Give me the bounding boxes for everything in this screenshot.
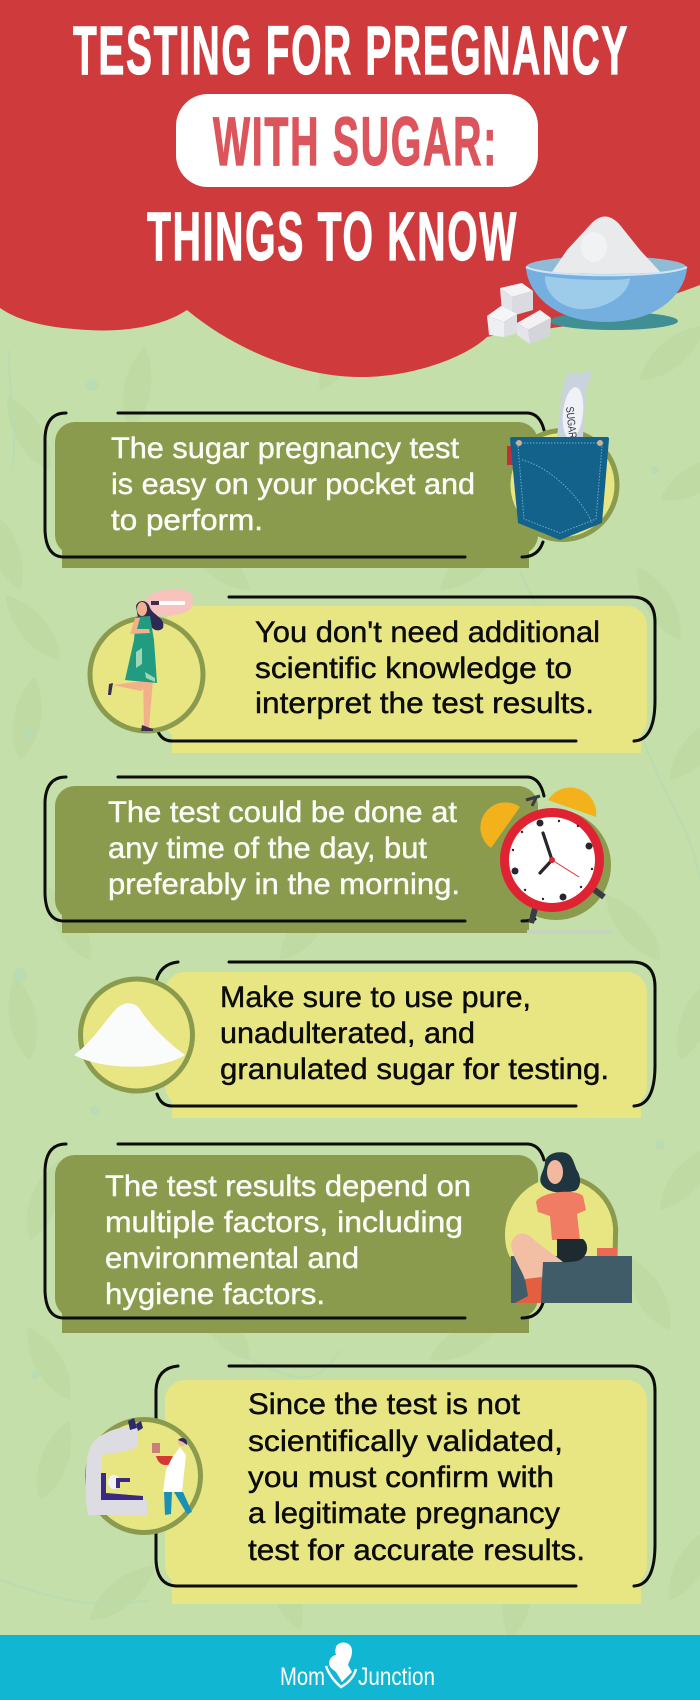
text: granulated sugar for testing. bbox=[220, 1053, 609, 1086]
text: Make sure to use pure, bbox=[220, 981, 531, 1014]
panel: confirm with a legitimate test bbox=[86, 1366, 655, 1604]
text: scientific knowledge to bbox=[255, 652, 572, 685]
logo: MomJunction bbox=[280, 1643, 435, 1691]
text: you must confirm with bbox=[248, 1461, 554, 1494]
text: You don't need additional bbox=[255, 616, 600, 649]
text: environmental and bbox=[105, 1242, 359, 1275]
panel: easy on your pocket bbox=[45, 372, 617, 568]
title pill bbox=[176, 94, 538, 187]
icon: woman with pregnancy test bbox=[90, 589, 203, 731]
panel: pure sugar bbox=[74, 962, 655, 1118]
icon: sugar bowl with cubes bbox=[487, 216, 687, 344]
title bbox=[73, 12, 629, 275]
text: interpret the test results. bbox=[255, 687, 594, 720]
text: preferably in the morning. bbox=[108, 868, 460, 901]
sugar cubes bbox=[487, 283, 551, 344]
text: The sugar pregnancy test bbox=[111, 432, 459, 465]
footer band bbox=[0, 1635, 700, 1700]
text bbox=[111, 432, 475, 537]
text bbox=[248, 1388, 585, 1567]
text: Since the test is not bbox=[248, 1388, 520, 1421]
panel: no scientific knowledge bbox=[90, 589, 655, 753]
text bbox=[105, 1170, 471, 1311]
logo: MomJunction: Junction bbox=[358, 1663, 435, 1691]
text: a legitimate pregnancy bbox=[248, 1497, 560, 1530]
text bbox=[255, 616, 600, 720]
text: The test could be done at bbox=[108, 796, 457, 829]
text: The test results depend on bbox=[105, 1170, 471, 1203]
text: unadulterated, and bbox=[220, 1017, 475, 1050]
text: test for accurate results. bbox=[248, 1534, 585, 1567]
text: scientifically validated, bbox=[248, 1425, 563, 1458]
text: to perform. bbox=[111, 504, 263, 537]
icon: woman sitting with test bbox=[505, 1152, 632, 1303]
header red cloud bbox=[0, 0, 700, 377]
icon: mother and child in heart bbox=[326, 1643, 356, 1687]
icon: jeans pocket with sugar packet: SUGAR bbox=[563, 406, 578, 439]
icon: jeans pocket with sugar packet bbox=[507, 372, 617, 540]
text: any time of the day, but bbox=[108, 832, 427, 865]
icon: sugar pile bbox=[74, 979, 192, 1091]
text: multiple factors, including bbox=[105, 1206, 463, 1239]
text bbox=[220, 981, 609, 1086]
logo: MomJunction: Mom bbox=[280, 1663, 325, 1691]
background leaf pattern bbox=[0, 310, 700, 1642]
icon: alarm clock bbox=[480, 787, 612, 934]
panel: multiple factors bbox=[45, 1144, 632, 1333]
icon: microscope and scientist bbox=[86, 1418, 200, 1532]
text bbox=[108, 796, 460, 901]
text: hygiene factors. bbox=[105, 1278, 325, 1311]
title pill: WITH SUGAR: bbox=[213, 103, 498, 180]
panel: any time of the day bbox=[45, 777, 612, 934]
text: is easy on your pocket and bbox=[111, 468, 475, 501]
